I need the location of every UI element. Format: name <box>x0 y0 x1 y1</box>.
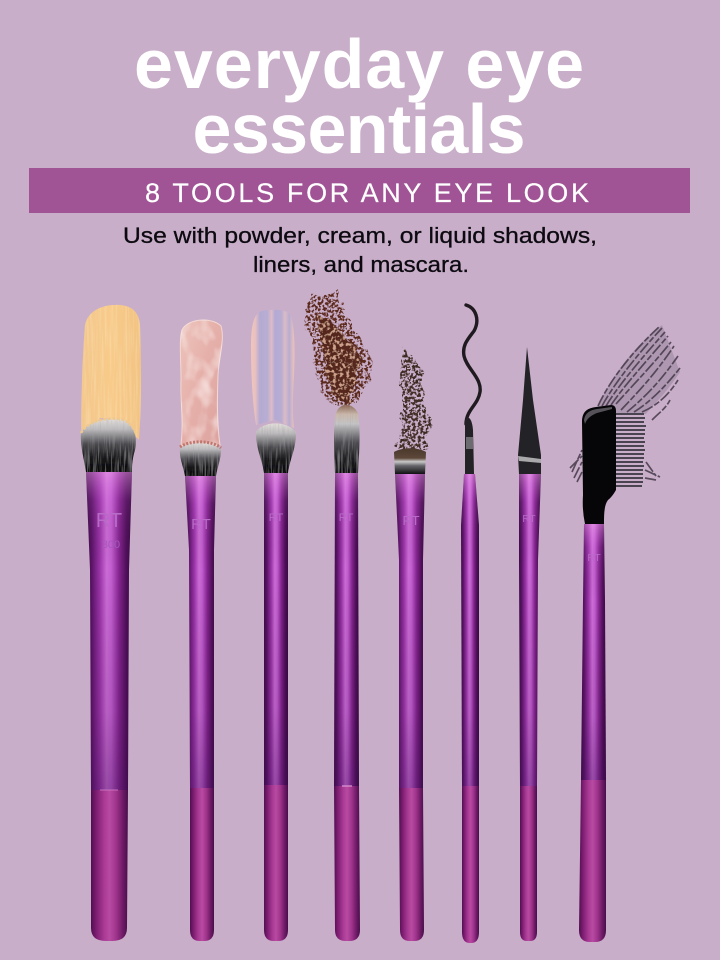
pink swatch <box>180 320 222 450</box>
ferrule <box>461 474 479 786</box>
comb head shine <box>584 407 612 424</box>
bristles <box>180 442 221 476</box>
ferrule <box>86 472 132 790</box>
handle <box>462 786 479 943</box>
title: essentials <box>192 90 526 168</box>
banner <box>29 168 690 213</box>
orange swatch <box>81 305 141 442</box>
handle joint highlight <box>342 785 352 787</box>
ferrule <box>334 473 359 786</box>
logo text: RT <box>587 553 601 564</box>
brush 7: pointed angled brush <box>518 347 541 941</box>
brush 3: blending brush with lilac swatch <box>251 310 296 941</box>
title: everyday eye <box>134 25 584 103</box>
lilac swatch <box>251 310 295 428</box>
handle <box>520 786 537 941</box>
model number: 300 <box>102 539 120 551</box>
brush 5: smudge brush with dark powder <box>394 345 432 941</box>
bristle band <box>518 456 541 463</box>
ferrule <box>185 476 216 788</box>
ferrule <box>395 474 425 788</box>
comb teeth <box>616 414 646 486</box>
bristle tip tint <box>81 419 136 434</box>
logo text: RT <box>339 512 354 524</box>
logo text: RT <box>402 513 420 528</box>
brush 1: large powder brush with orange swatch <box>81 305 141 941</box>
brush 2: cream brush with pink swatch <box>180 320 222 941</box>
bristles <box>334 405 360 473</box>
banner: 8 TOOLS FOR ANY EYE LOOK <box>145 178 589 208</box>
ferrule <box>519 474 541 786</box>
logo text: RT <box>96 510 122 532</box>
ferrule <box>581 524 606 780</box>
mascara smear strokes <box>570 326 680 482</box>
bristles <box>394 448 426 474</box>
comb head <box>582 405 616 524</box>
description text: Use with powder, cream, or liquid shadows, <box>123 223 597 248</box>
handle <box>190 788 214 941</box>
powder core <box>400 358 422 450</box>
description text <box>123 223 597 277</box>
bristle band <box>466 437 473 449</box>
brush 6: fine liner brush with wavy line <box>461 305 480 943</box>
logo text: RT <box>269 512 284 524</box>
handle joint highlight <box>100 789 118 791</box>
dark powder scatter <box>396 345 432 450</box>
wavy liner stroke <box>464 305 480 424</box>
bristles <box>81 419 136 472</box>
logo text: RT <box>191 516 211 533</box>
pointed bristles <box>518 347 541 474</box>
handle <box>264 785 288 941</box>
brown powder scatter <box>304 292 370 404</box>
brush 4: tapered brush with brown powder <box>304 292 370 941</box>
powder core <box>318 316 360 402</box>
bristles <box>465 418 474 474</box>
handle <box>334 786 360 941</box>
ferrule <box>264 473 288 785</box>
handle <box>91 790 128 941</box>
brush 8: lash comb with mascara smear <box>570 325 680 942</box>
mascara smear base <box>597 325 680 414</box>
bristles <box>256 423 296 473</box>
handle <box>399 788 424 941</box>
logo text: RT <box>522 514 536 525</box>
swatch rim <box>180 442 221 448</box>
description text: liners, and mascara. <box>253 252 469 277</box>
title <box>134 25 584 168</box>
handle <box>579 780 606 942</box>
